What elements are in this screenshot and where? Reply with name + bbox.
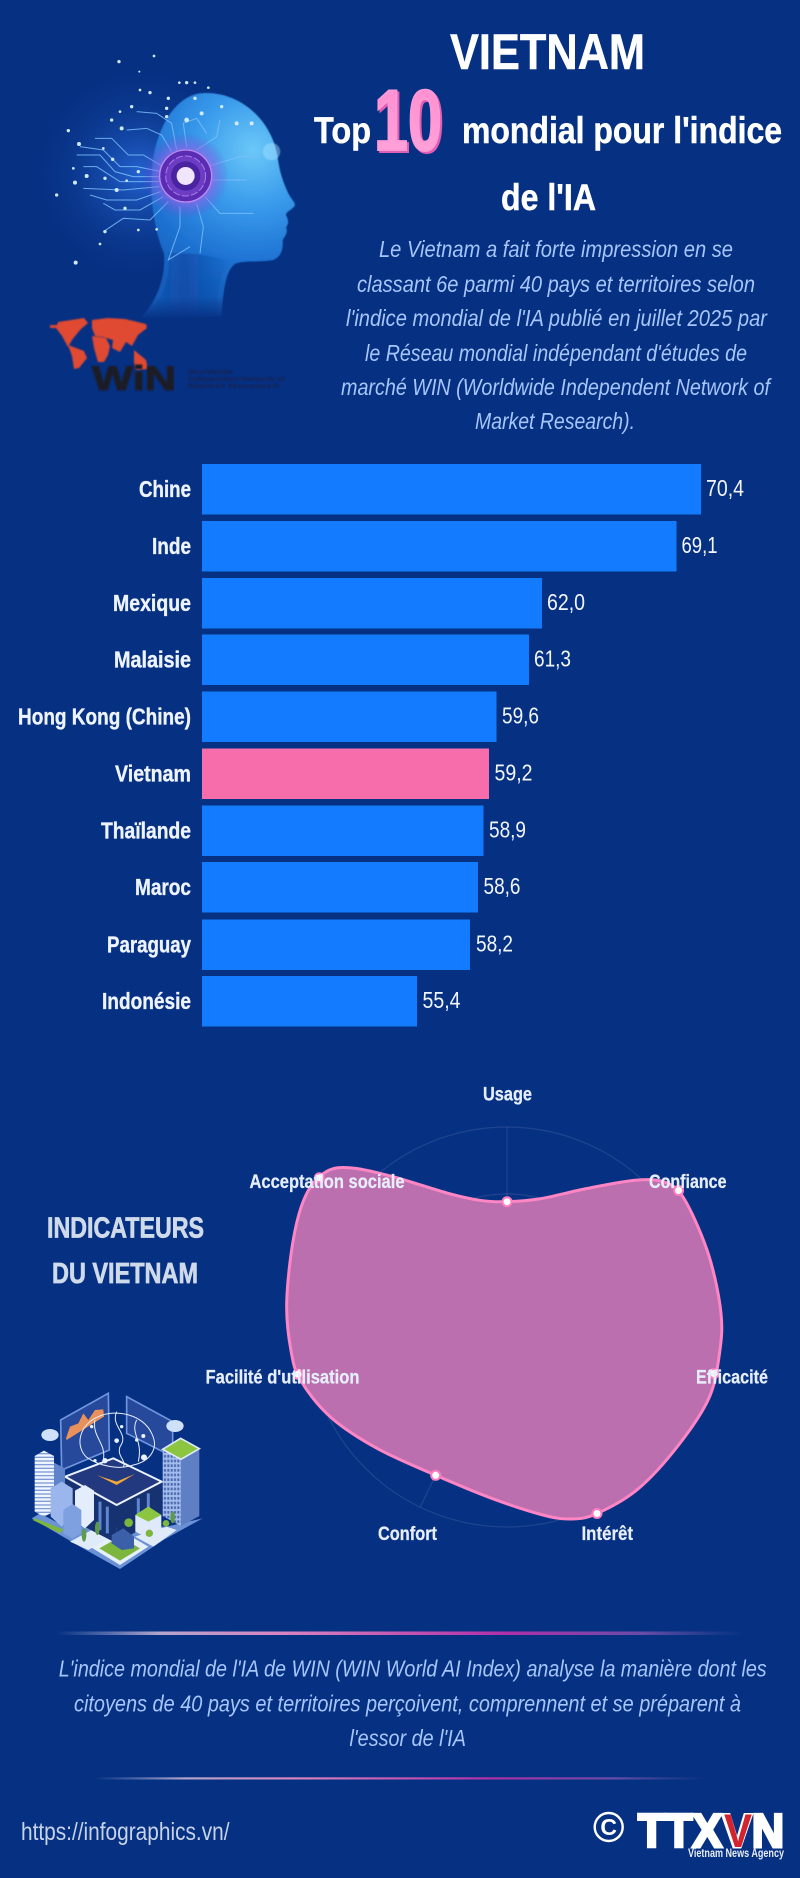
copyright symbol: C	[600, 1814, 617, 1840]
bar: Hong Kong (Chine): Hong Kong (Chine)	[18, 704, 191, 730]
logo tagline	[188, 369, 286, 390]
radar labels: Facilité d'utilisation	[206, 1367, 360, 1388]
clouds	[41, 1420, 184, 1441]
logo tagline: Worldwide	[188, 369, 234, 376]
intro paragraph: classant 6e parmi 40 pays et territoires selon	[357, 271, 755, 297]
radar shape	[287, 1168, 722, 1519]
title: VIETNAM: VIETNAM	[450, 24, 645, 80]
bar: Inde: 69,1	[682, 532, 718, 558]
source URL: https://infographics.vn/	[21, 1818, 230, 1846]
radar chart	[206, 1085, 768, 1545]
bar: Hong Kong (Chine): 59,6	[502, 702, 539, 728]
logo wordmark: WiN	[92, 360, 176, 398]
title: de l'IA: de l'IA	[501, 177, 596, 218]
logo: TTXVN: TTXVN	[638, 1804, 784, 1857]
bar: Inde: Inde	[152, 533, 191, 559]
bar: Vietnam	[115, 748, 532, 799]
divider top	[56, 1632, 745, 1635]
bar: Thaïlande	[101, 806, 526, 856]
illustration: smart city	[32, 1393, 203, 1569]
section heading: indicateurs du Vietnam	[47, 1212, 204, 1290]
title: Top: Top	[314, 110, 371, 151]
logo tagline: Independent Network of	[188, 376, 286, 383]
bar: Thaïlande: Thaïlande	[101, 818, 191, 844]
small green building and trees	[82, 1507, 175, 1550]
logo map	[50, 318, 148, 370]
bar: Mexique	[113, 578, 585, 628]
copyright symbol	[595, 1813, 623, 1841]
right panel	[127, 1397, 173, 1457]
bar chart	[18, 464, 744, 1026]
radar labels: Confiance	[649, 1172, 726, 1193]
left panel	[61, 1393, 109, 1470]
base plate	[32, 1513, 203, 1569]
bar: Paraguay: Paraguay	[107, 932, 191, 958]
bar: Vietnam: 59,2	[494, 760, 532, 786]
intro paragraph: le Réseau mondial indépendant d'études de	[365, 340, 747, 366]
brain	[80, 1412, 154, 1467]
bar: Indonésie: Indonésie	[102, 988, 191, 1014]
bar: Maroc: 58,6	[484, 873, 520, 899]
bar: Indonésie	[102, 976, 461, 1026]
intro paragraph	[341, 236, 772, 434]
left towers	[35, 1451, 94, 1538]
bar: Malaisie: Malaisie	[114, 646, 191, 672]
bar: Malaisie: 61,3	[534, 646, 571, 672]
section heading: indicateurs du Vietnam: INDICATEURS	[47, 1212, 204, 1244]
bar: Mexique: Mexique	[113, 590, 191, 616]
right tower	[163, 1438, 199, 1526]
radar labels	[206, 1085, 768, 1545]
bar: Maroc	[135, 862, 520, 912]
radar labels: Usage	[483, 1085, 532, 1106]
radar labels: Efficacité	[696, 1367, 768, 1388]
bar: Malaisie	[114, 634, 571, 685]
bar: Vietnam: Vietnam	[115, 760, 191, 786]
bar: Chine: Chine	[139, 476, 191, 502]
bar: Chine	[139, 464, 744, 514]
illustration: AI head	[27, 55, 295, 320]
radar labels: Acceptation sociale	[250, 1172, 404, 1193]
title	[314, 24, 782, 218]
bar: Mexique: 62,0	[547, 589, 585, 615]
radar labels: Intérêt	[582, 1524, 634, 1545]
radar labels: Confort	[378, 1524, 438, 1545]
logo: WIN	[50, 318, 286, 398]
bar: Indonésie: 55,4	[422, 987, 461, 1013]
footnote paragraph: l'essor de l'IA	[350, 1725, 466, 1751]
bar: Hong Kong (Chine)	[18, 692, 539, 742]
intro paragraph: Market Research).	[475, 408, 635, 434]
bar: Chine: 70,4	[706, 475, 744, 501]
bar: Maroc: Maroc	[135, 874, 191, 900]
bar: Paraguay	[107, 920, 513, 970]
footnote paragraph	[59, 1656, 767, 1751]
logo tagline: Market Research	[188, 383, 280, 390]
radar points	[294, 1173, 718, 1518]
radar grid	[307, 1127, 707, 1527]
bar: Thaïlande: 58,9	[489, 816, 526, 842]
divider bottom	[94, 1777, 707, 1780]
bar: Paraguay: 58,2	[476, 930, 513, 956]
logo: TTXVN: V	[724, 1804, 753, 1857]
title: big number 10: 10	[376, 75, 444, 171]
section heading: indicateurs du Vietnam: DU VIETNAM	[52, 1258, 198, 1290]
title: big number 10: 10	[374, 73, 442, 169]
central building	[65, 1458, 162, 1543]
intro paragraph: Le Vietnam a fait forte impression en se	[379, 236, 733, 262]
bar: Inde	[152, 521, 718, 572]
